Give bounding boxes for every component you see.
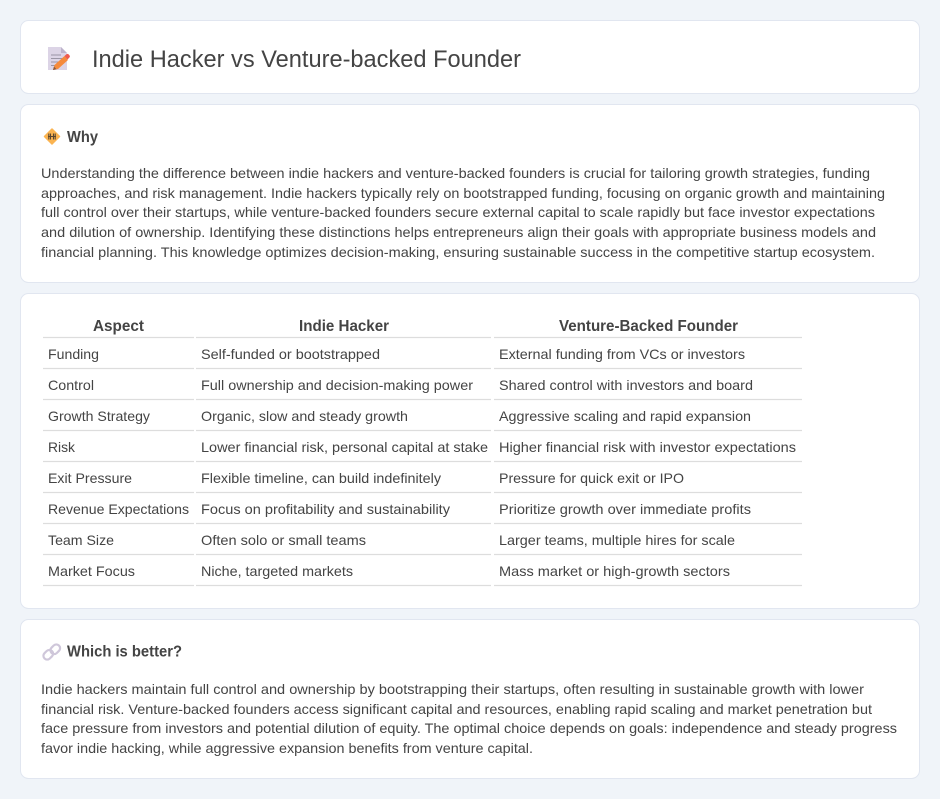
row: growth strategy: Organic, slow and steady growth [201, 408, 408, 424]
text block: why: financial planning. This knowledge optimizes decision-making, ensuring sustainable success in the competitive startup ecosystem. [41, 244, 875, 260]
row: team size: Team Size [48, 532, 114, 548]
row: market focus [48, 563, 730, 579]
row: market focus: Niche, targeted markets [201, 563, 353, 579]
row: market focus: Mass market or high-growth sectors [499, 563, 730, 579]
heading: why: Why [67, 129, 98, 146]
text block: which is better: Indie hackers maintain full control and ownership by bootstrapping their startups, often resulting in sustainable growth with lower [41, 681, 864, 697]
row: revenue expectations: Prioritize growth over immediate profits [499, 501, 751, 517]
table header [93, 318, 738, 335]
row: funding: External funding from VCs or investors [499, 346, 745, 362]
row: exit pressure [48, 470, 684, 486]
row: control: Full ownership and decision-making power [201, 377, 473, 393]
panel: which is better [20, 620, 920, 778]
text block: why: and dilution of ownership. Identifying these distinctions helps entrepreneurs align their goals with appropriate business models and [41, 224, 876, 240]
row: revenue expectations: Revenue Expectations [48, 501, 189, 517]
row: growth strategy: Aggressive scaling and rapid expansion [499, 408, 751, 424]
row: team size: Often solo or small teams [201, 532, 366, 548]
table header: Venture-Backed Founder [559, 318, 738, 335]
row: funding: Funding [48, 346, 99, 362]
row: revenue expectations: Focus on profitability and sustainability [201, 501, 450, 517]
text block: which is better [41, 681, 897, 756]
table header: Indie Hacker [299, 318, 389, 335]
row: revenue expectations [48, 501, 751, 517]
row: exit pressure: Pressure for quick exit or IPO [499, 470, 684, 486]
text block: why: full control over their startups, while venture-backed founders secure external capital to scale rapidly but face investor expectations [41, 204, 875, 220]
row: growth strategy [48, 408, 751, 424]
row: risk: Higher financial risk with investor expectations [499, 439, 796, 455]
row: market focus: Market Focus [48, 563, 135, 579]
title: Indie Hacker vs Venture-backed Founder [92, 46, 521, 73]
row: team size [48, 532, 735, 548]
text block: which is better: financial risk. Venture-backed founders access significant capital and resources, enabling rapid scaling and market penetration but [41, 701, 872, 717]
panel: why [20, 104, 920, 282]
row: team size: Larger teams, multiple hires for scale [499, 532, 735, 548]
icon: chain link [42, 643, 62, 661]
panel: comparison table [20, 294, 920, 608]
text block: why: approaches, and risk management. Indie hackers typically rely on bootstrapped funding, focusing on organic growth and maintaining [41, 185, 885, 201]
table header: Aspect [93, 318, 145, 335]
heading: which is better: Which is better? [67, 644, 182, 660]
text block: why: Understanding the difference between indie hackers and venture-backed founders is crucial for tailoring growth strategies, funding [41, 165, 870, 181]
row: risk: Risk [48, 439, 76, 455]
row: funding: Self-funded or bootstrapped [201, 346, 380, 362]
icon: warning diamond [44, 129, 60, 144]
row: exit pressure: Exit Pressure [48, 470, 132, 486]
panel: header [20, 20, 920, 94]
row: control: Control [48, 377, 94, 393]
row: exit pressure: Flexible timeline, can build indefinitely [201, 470, 441, 486]
text block: which is better: face pressure from investors and potential dilution of equity. The optimal choice depends on goals: independence and steady progress [41, 720, 897, 736]
row: control [48, 377, 753, 393]
icon: memo with pencil [48, 47, 70, 70]
text block: why [41, 165, 885, 260]
row: growth strategy: Growth Strategy [48, 408, 150, 424]
text block: which is better: favor indie hacking, while aggressive expansion benefits from venture capital. [41, 740, 533, 756]
row: control: Shared control with investors and board [499, 377, 753, 393]
row: risk [48, 439, 796, 455]
row: risk: Lower financial risk, personal capital at stake [201, 439, 488, 455]
row: funding [48, 346, 745, 362]
